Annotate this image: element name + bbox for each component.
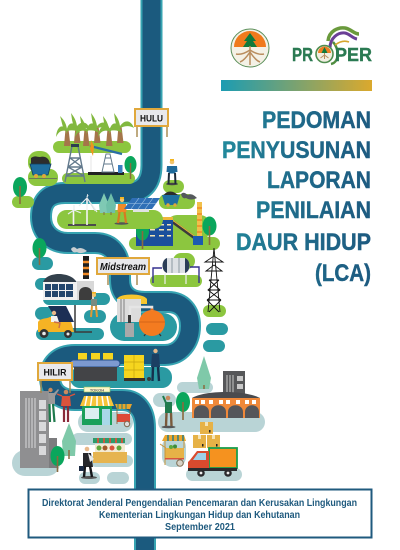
title: LAPORAN (267, 167, 371, 194)
figure: man in grey shirt (48, 388, 59, 422)
sign: Midstream: Midstream (100, 262, 146, 273)
icon: stacked cardboard boxes (193, 422, 220, 448)
icon: tree in front of factory (136, 222, 149, 249)
scene: forklift (35, 305, 104, 340)
decorative teal pills on right (203, 323, 228, 352)
scene: refinery tanks (110, 294, 177, 341)
icon: market stall (93, 438, 127, 463)
publisher box: Direktorat Jenderal Pengendalian Pencemaran dan Kerusakan Lingkungan (42, 498, 357, 509)
icon: office building (20, 391, 57, 468)
logo: PROPER: PER (335, 45, 372, 65)
publisher box (28, 490, 372, 538)
title: (LCA) (315, 260, 371, 287)
icon: smoke (71, 247, 87, 253)
icon: solar panels (124, 198, 160, 212)
sign: HILIR (38, 363, 72, 393)
scene: gas storage tank (150, 253, 202, 287)
icon: small red cart (115, 404, 132, 427)
icon: pallet of yellow boxes (124, 355, 145, 381)
figure: waving worker (162, 396, 176, 428)
scene: shopping street ground (12, 412, 133, 484)
icon: tree by warehouse (176, 392, 190, 420)
figure: warehouse worker (147, 349, 160, 381)
scene: coal cart and smoke on right (159, 192, 197, 209)
figure: worker with tablet (84, 292, 106, 323)
publisher box: September 2021 (165, 522, 235, 533)
scene: renewable energy field (57, 194, 163, 229)
scene: factory with chimney (35, 256, 110, 305)
title: PENYUSUNAN (222, 137, 371, 164)
icon: left tree on green pill (12, 177, 34, 208)
scene: coal cart on hill (28, 151, 58, 186)
icon: orange warehouse (192, 392, 260, 418)
scene: conveyor with yellow boxes (70, 353, 172, 388)
icon: delivery truck (188, 448, 237, 477)
icon: teal pine trees (99, 193, 116, 215)
icon: teal pine tree right (197, 356, 211, 389)
icon: tree by factory right (202, 216, 216, 245)
figure: man in black suit (79, 447, 97, 479)
gradient bar (221, 80, 372, 91)
icon: tree near pump jack (124, 156, 136, 179)
icon: shop stall: TOKOH (90, 387, 104, 392)
title (222, 107, 371, 287)
sign: HULU (135, 109, 168, 137)
logo: PROPER (292, 28, 372, 65)
title: PENILAIAN (256, 197, 371, 224)
icon: tree on teal pill (32, 238, 53, 270)
figure: worker in orange (114, 197, 128, 225)
icon: teal pine tree left (62, 423, 76, 459)
sign: HILIR: HILIR (44, 368, 67, 378)
title: DAUR HIDUP (236, 229, 371, 256)
logo: PROPER: PR (292, 45, 313, 65)
scene: oil derrick and pump jack (62, 140, 135, 184)
icon: green tree by building (50, 446, 64, 472)
icon: transmission tower (203, 248, 226, 317)
icon: food cart (160, 435, 186, 466)
title: PEDOMAN (262, 107, 371, 134)
logo: KLHK ministry emblem (231, 29, 269, 67)
icon: warehouse tower (223, 371, 245, 395)
sign: Midstream (97, 258, 149, 285)
scene: oil palm plantation (53, 113, 134, 153)
sign: HULU: HULU (140, 114, 163, 124)
scene: blue factory (129, 202, 220, 250)
scene: warehouse area ground (153, 382, 265, 481)
figure: woman in red (57, 390, 75, 422)
icon: shop stall (80, 387, 114, 425)
river road (41, 0, 190, 550)
figure: worker in blue (163, 159, 184, 193)
publisher box: Kementerian Lingkungan Hidup dan Kehutanan (99, 510, 300, 521)
